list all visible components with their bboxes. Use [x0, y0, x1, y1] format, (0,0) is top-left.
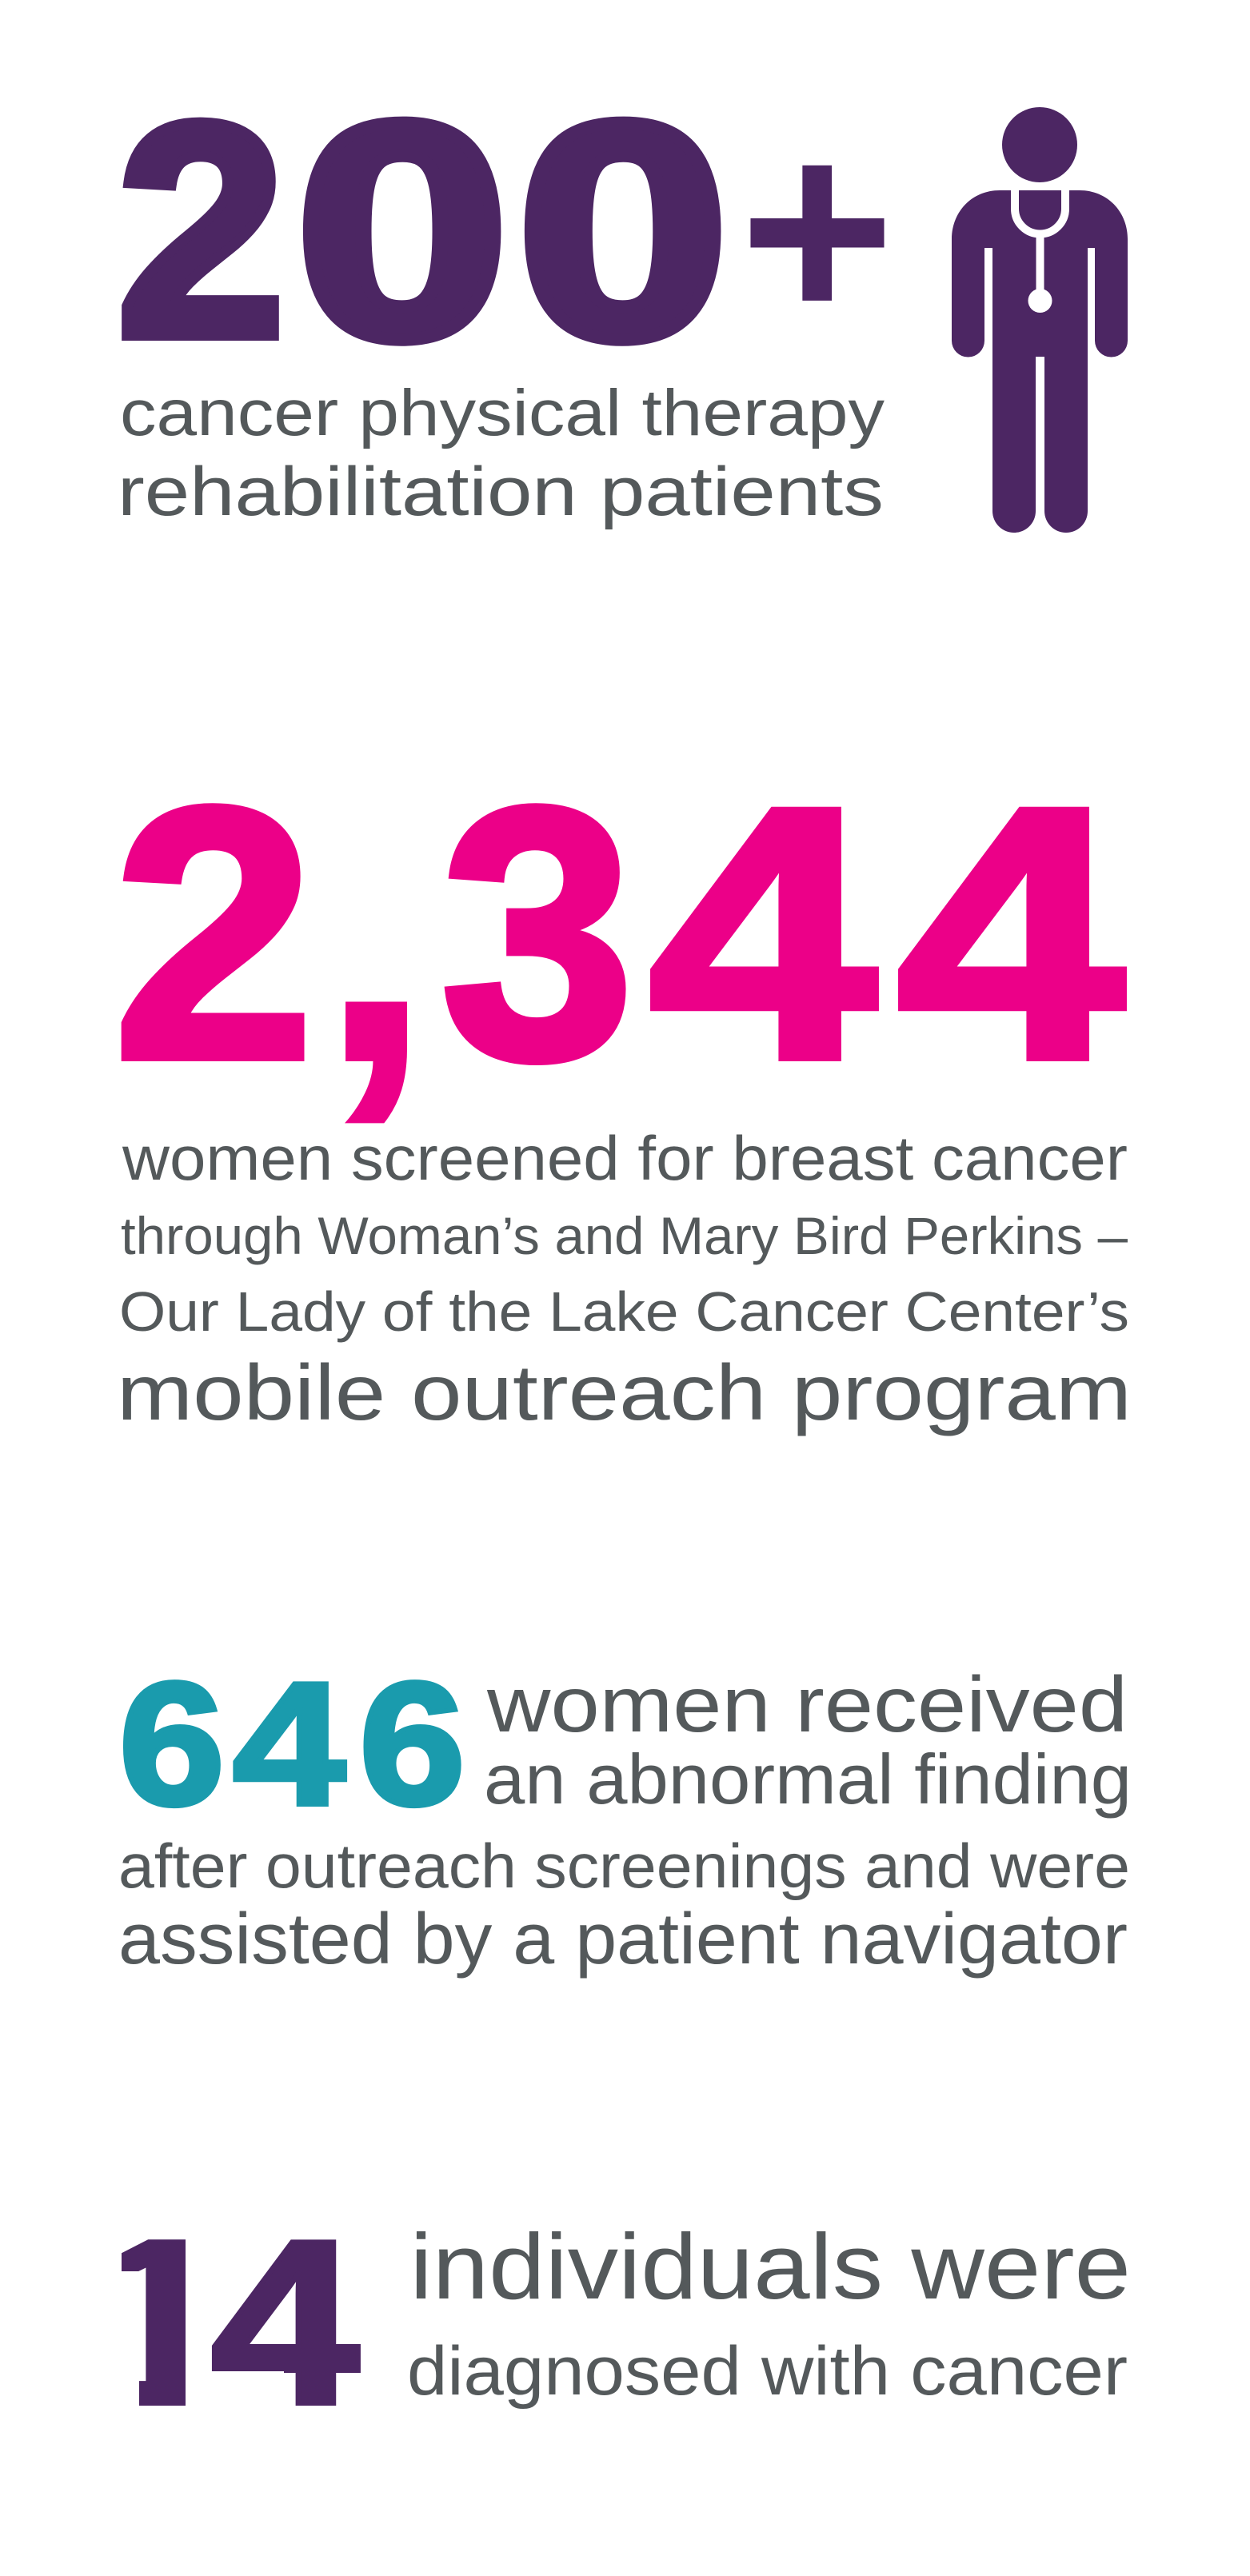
big number: 14	[122, 2239, 361, 2406]
text: women received an abnormal finding: an abnormal finding	[484, 1739, 1132, 1819]
panel: women screened	[113, 699, 1132, 1436]
big number: 2,344: 4	[897, 733, 1127, 1133]
text: after outreach screenings: assisted by a patient navigator	[118, 1899, 1128, 1979]
text: women received an abnormal finding	[484, 1660, 1132, 1819]
text: women screened description: women screened for breast cancer	[122, 1123, 1128, 1193]
text: after outreach screenings: after outreach screenings and were	[118, 1831, 1130, 1901]
big number: 14: 4	[210, 2192, 361, 2454]
big number: 200+: +	[739, 81, 895, 378]
big number: 200+: 0	[296, 60, 509, 402]
big number: 200+	[117, 60, 895, 402]
big number: 2,344: 4	[649, 733, 879, 1133]
text: women screened description: through Woman’s and Mary Bird Perkins –	[121, 1206, 1128, 1265]
text: individuals were diagnosed with cancer: diagnosed with cancer	[407, 2333, 1128, 2410]
text: individuals were diagnosed with cancer	[407, 2215, 1131, 2410]
text: individuals were diagnosed with cancer: individuals were	[409, 2215, 1131, 2318]
text: women screened description: mobile outreach program	[117, 1348, 1132, 1436]
text: women screened description: Our Lady of the Lake Cancer Center’s	[119, 1280, 1129, 1343]
text: cancer physical therapy rehabilitation patients: rehabilitation patients	[118, 453, 884, 530]
big number: 646: 6	[359, 1647, 465, 1842]
icon: doctor with stethoscope	[952, 107, 1128, 533]
big number: 14: 1	[74, 2187, 245, 2457]
text: after outreach screenings	[118, 1831, 1130, 1979]
panel: physical therapy patients	[117, 60, 1128, 533]
text: women received an abnormal finding: women received	[486, 1660, 1128, 1748]
big number: 2,344: ,	[315, 699, 437, 1146]
text: cancer physical therapy rehabilitation patients: cancer physical therapy	[120, 377, 885, 449]
big number: 646: 6	[118, 1647, 225, 1842]
big number: 200+: 0	[517, 60, 729, 402]
big number: 646: 4	[233, 1647, 345, 1842]
big number: 200+: 2	[117, 60, 286, 400]
panel: diagnosed individuals	[122, 2231, 1126, 2409]
big number: 2,344: 2	[113, 733, 315, 1133]
big number: 2,344: 3	[441, 733, 634, 1133]
text: cancer physical therapy rehabilitation patients	[118, 377, 885, 530]
panel: abnormal findings	[118, 1647, 1132, 1979]
text: women screened description	[117, 1123, 1132, 1436]
